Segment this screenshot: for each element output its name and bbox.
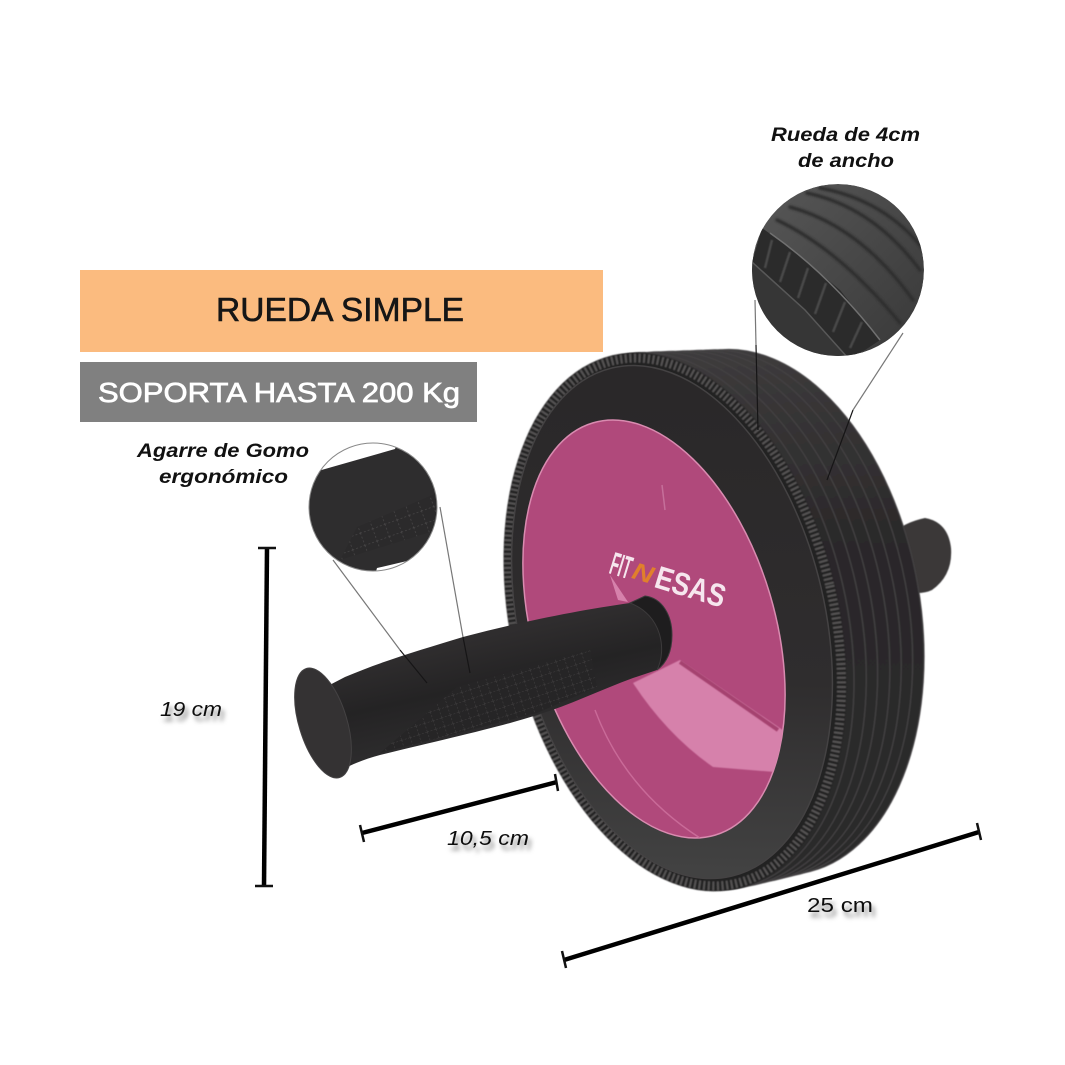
title banner: RUEDA SIMPLE: RUEDA SIMPLE [216,291,464,328]
logo: FITNESAS: FIT [606,545,637,586]
handle end cap [283,661,363,785]
label: wheel width: Rueda de 4cm [771,125,920,146]
wheel face rim [463,333,881,911]
label: grip: ergonómico [159,467,288,488]
lower rim face [745,262,848,358]
title banner: RUEDA SIMPLE [80,270,603,352]
white background cap, bottom [376,561,406,570]
zoom circle: wheel tread [745,184,924,358]
logo: FITNESAS: N [629,558,658,590]
handle grip texture [380,650,597,753]
tread streaks [777,188,924,323]
grip texture [340,493,437,560]
handle collar [630,596,672,670]
logo: FITNESAS: ESAS [651,559,730,614]
capacity banner: SOPORTA HASTA 200 Kg [80,362,477,422]
zoom circle: rubber grip [309,435,437,575]
capacity banner: SOPORTA HASTA 200 Kg: SOPORTA HASTA 200 Kg [98,377,460,408]
handle [283,596,672,785]
dimension: handle 10,5 cm [360,774,558,850]
pink hub [522,419,786,839]
callout lines: wheel [755,300,903,480]
label: 25 cm: 25 cm [807,895,873,917]
logo: FITNESAS [606,545,730,614]
label: wheel width: de ancho [798,151,894,172]
label: grip: Agarre de Gomo [136,441,309,462]
label: grip [136,441,309,488]
ab wheel product [294,348,952,892]
label: wheel width [771,125,920,172]
infographic canvas [80,127,982,968]
hub highlight [633,660,790,772]
dimension: diameter 25 cm [562,823,981,968]
far axle knob [890,518,951,593]
callout lines: grip [333,507,470,683]
tread tooth band [752,228,880,358]
serrated wheel edge [453,318,897,926]
label: 10,5 cm: 10,5 cm [447,828,529,850]
dimension: height 19 cm [160,548,276,886]
white background cap, top [321,444,396,470]
wheel tread ribs [462,318,964,924]
label: 19 cm: 19 cm [160,699,222,721]
